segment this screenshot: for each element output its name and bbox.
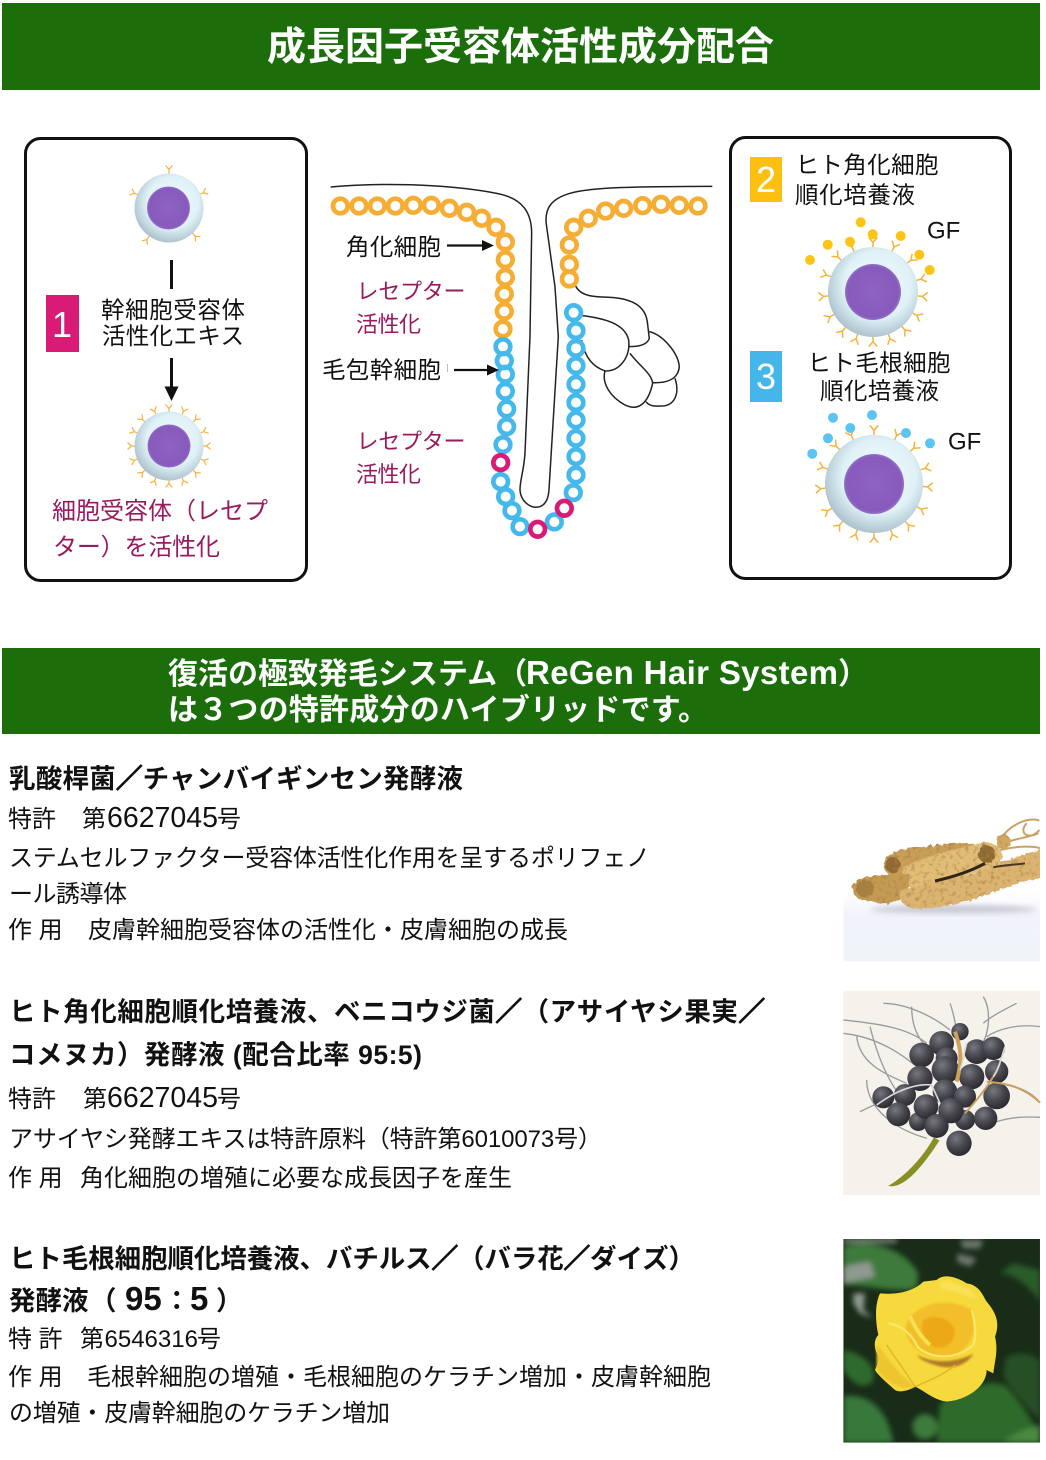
- ingredient 3 text: （: [90, 1286, 116, 1316]
- title banner: 成長因子受容体活性成分配合: [267, 26, 774, 69]
- follicle outline: [331, 184, 712, 507]
- keratinocyte cells: [333, 197, 705, 336]
- label: follicle stem cell with arrow: 毛包幹細胞: [322, 357, 441, 383]
- hair root medium label: [808, 350, 950, 404]
- icon: cell with blue growth factors: [807, 410, 935, 543]
- ingredient 1 text: 号: [217, 806, 241, 833]
- ingredient 1 text: 乳酸桿菌／チャンバイギンセン発酵液: [9, 764, 464, 794]
- ingredient 2 text: 特許: [8, 1086, 80, 1113]
- keratinocyte medium label: 順化培養液: [795, 182, 915, 208]
- ingredient 2 text: [8, 997, 765, 1192]
- label: follicle stem cell with arrow: [322, 357, 499, 383]
- badge 2: [750, 157, 782, 202]
- ingredient 2 text: アサイヤシ発酵エキスは特許原料（特許第6010073号）: [9, 1126, 602, 1153]
- photo: ginseng root: [844, 818, 1040, 962]
- ingredient 3 text: ）: [216, 1286, 242, 1316]
- panel: steps 2 and 3 conditioned media: [730, 138, 1010, 578]
- ingredient 1 text: [8, 764, 650, 944]
- ingredient 2 text: コメヌカ）発酵液 (配合比率 95:5): [9, 1040, 422, 1070]
- follicle stem cells: [493, 305, 583, 534]
- photo: yellow rose: [843, 1239, 1040, 1443]
- ingredient 3 text: 95: [125, 1280, 162, 1317]
- hair root medium label: ヒト毛根細胞: [808, 350, 950, 376]
- icon: cell with yellow growth factors: [805, 217, 935, 347]
- label: keratinocyte with arrow: [346, 234, 494, 260]
- ingredient 1 text: ール誘導体: [9, 881, 127, 908]
- title banner: [2, 3, 1040, 90]
- label: GF yellow: GF: [927, 218, 960, 244]
- ingredient 2 text: 第: [83, 1086, 107, 1113]
- icon: activated cell with receptors: [128, 404, 210, 488]
- arrow down: [164, 358, 178, 401]
- ingredient 3 text: ：: [164, 1286, 190, 1316]
- activation caption: ター）を活性化: [53, 534, 220, 561]
- label: receptor activation lower: 活性化: [356, 462, 421, 487]
- ingredient 3 text: 第: [80, 1326, 104, 1353]
- ingredient 3 text: [8, 1244, 711, 1427]
- ingredient 1 text: 作 用: [8, 917, 87, 944]
- extract label: 幹細胞受容体: [101, 297, 245, 323]
- connector line: [170, 260, 173, 289]
- section heading: ReGen Hair System: 復活の極致発毛システム（: [168, 658, 527, 691]
- ingredient 3 text: 特 許: [8, 1326, 87, 1353]
- activation caption: 細胞受容体（レセプ: [52, 498, 268, 525]
- badge 1: 1: [52, 304, 72, 345]
- ingredient 1 text: 第: [82, 806, 106, 833]
- ingredient 3 text: 発酵液: [9, 1286, 89, 1316]
- ingredient 3 text: 5: [190, 1280, 208, 1317]
- ingredient 2 text: 作 用: [8, 1165, 87, 1192]
- ingredient 1 text: ステムセルファクター受容体活性化作用を呈するポリフェノ: [9, 845, 650, 872]
- label: receptor activation upper: レセプター: [356, 279, 466, 304]
- activated cells: [493, 455, 572, 537]
- section heading: ReGen Hair System: ）: [838, 658, 868, 691]
- ingredient 1 text: 特許: [8, 806, 80, 833]
- ingredient 1 text: 6627045: [107, 802, 218, 834]
- badge 1: [46, 295, 79, 352]
- badge 3: [750, 351, 782, 402]
- ingredient 3 text: ヒト毛根細胞順化培養液、バチルス／（バラ花／ダイズ）: [9, 1244, 695, 1274]
- ingredient 3 text: の増殖・皮膚幹細胞のケラチン増加: [9, 1400, 390, 1427]
- photo: acai berries: [843, 991, 1040, 1195]
- section heading: ReGen Hair System: は３つの特許成分のハイブリッドです。: [168, 693, 708, 727]
- label: receptor activation lower: [356, 429, 466, 487]
- ingredient 2 text: ヒト角化細胞順化培養液、ベニコウジ菌／（アサイヤシ果実／: [9, 997, 765, 1027]
- hair root medium label: 順化培養液: [820, 378, 939, 404]
- ingredient 3 text: 作 用: [8, 1364, 87, 1391]
- ingredient 3 text: 6546316: [104, 1326, 198, 1353]
- activation caption: [52, 498, 268, 561]
- chart: hair follicle diagram: [322, 184, 712, 537]
- label: receptor activation lower: レセプター: [356, 429, 466, 454]
- badge 2: 2: [756, 159, 776, 200]
- extract label: 活性化エキス: [102, 323, 244, 349]
- label: receptor activation upper: 活性化: [356, 312, 421, 337]
- extract label: [101, 297, 245, 349]
- ingredient 3 text: 号: [197, 1326, 221, 1353]
- section heading: ReGen Hair System: [2, 648, 1040, 734]
- ingredient 2 text: 角化細胞の増殖に必要な成長因子を産生: [80, 1165, 512, 1192]
- keratinocyte medium label: [795, 152, 938, 208]
- label: receptor activation upper: [356, 279, 466, 337]
- label: GF blue: GF: [948, 428, 981, 456]
- ingredient 2 text: 6627045: [107, 1082, 218, 1114]
- badge 3: 3: [756, 356, 776, 397]
- keratinocyte medium label: ヒト角化細胞: [796, 152, 938, 178]
- ingredient 3 text: 毛根幹細胞の増殖・毛根細胞のケラチン増加・皮膚幹細胞: [87, 1364, 711, 1391]
- panel: step 1 stem cell receptor activation: [26, 138, 306, 580]
- ingredient 1 text: 皮膚幹細胞受容体の活性化・皮膚細胞の成長: [88, 917, 568, 944]
- label: keratinocyte with arrow: 角化細胞: [346, 234, 441, 260]
- section heading: ReGen Hair System: ReGen Hair System: [526, 654, 838, 691]
- icon: stem cell before activation: [129, 166, 208, 245]
- ingredient 2 text: 号: [217, 1086, 241, 1113]
